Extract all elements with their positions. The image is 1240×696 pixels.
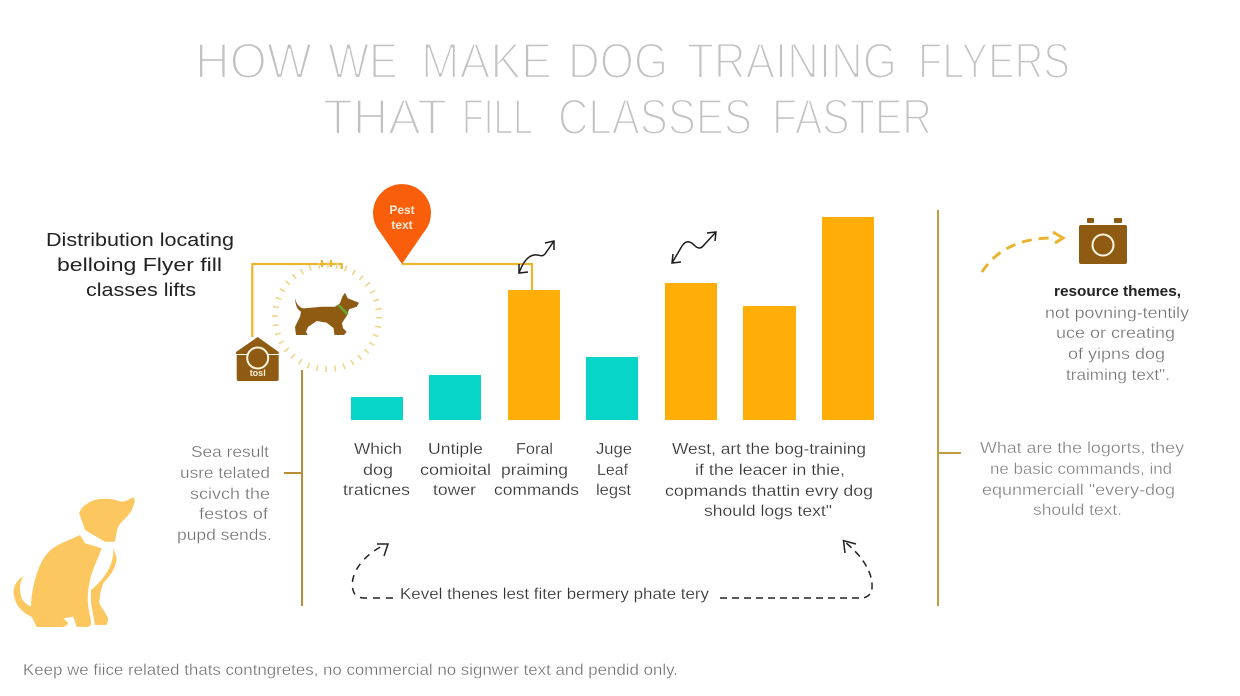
pin callout <box>373 184 431 264</box>
title: MAKE <box>421 33 552 89</box>
text block: right note: ne basic commands, ind <box>990 461 1172 478</box>
label: bar 2 <box>420 441 491 499</box>
label: bar 4: Leaf <box>597 462 629 479</box>
label: bar 4: legst <box>596 482 632 499</box>
text block: distribution heading: Distribution locating <box>46 230 234 250</box>
label: bars 5 to 7: West, art the bog-training <box>672 441 866 458</box>
label: bar 1 <box>343 441 410 499</box>
icon: house badge <box>236 337 279 381</box>
pin callout: text <box>391 218 413 232</box>
label: bars 5 to 7: copmands thattin evry dog <box>665 483 873 500</box>
pin callout: Pest <box>389 203 415 217</box>
title: HOW <box>195 33 313 89</box>
text block: resource themes: traiming text". <box>1066 367 1170 384</box>
footer note: Keep we fiice related thats contngretes, no commercial no signwer text and pendid only. <box>23 662 678 679</box>
label: bar 3 <box>494 441 579 499</box>
arrow: squiggle over third bar <box>519 241 554 273</box>
dashed bracket arrows with caption <box>352 541 872 603</box>
label: bar 1: traticnes <box>343 482 410 499</box>
text block: right note <box>980 440 1184 519</box>
vertical rule with right tick <box>938 210 961 606</box>
label: bar 2: tower <box>433 482 477 499</box>
icon: sitting dog silhouette <box>14 497 135 627</box>
label: bar 3: commands <box>494 482 579 499</box>
connector: house to pin to bar <box>252 260 532 337</box>
title <box>195 33 1070 145</box>
arrow: squiggle over fifth bar <box>672 232 716 263</box>
text block: resource themes: of yipns dog <box>1068 346 1165 363</box>
title: FLYERS <box>918 33 1070 89</box>
dashed bracket arrows with caption: Kevel thenes lest fiter bermery phate tery <box>400 586 709 603</box>
text block: right note: should text. <box>1033 502 1122 519</box>
vertical rule with left tick <box>284 370 302 606</box>
title: TRAINING <box>687 33 897 89</box>
text block: resource themes: resource themes, <box>1054 283 1181 300</box>
chart labels <box>343 441 873 520</box>
icon: camera <box>1079 218 1127 264</box>
label: bar 2: comioital <box>420 462 491 479</box>
label: bar 2: Untiple <box>428 441 483 458</box>
label: bars 5 to 7: if the leacer in thie, <box>695 462 845 479</box>
title: FILL <box>462 89 533 145</box>
text block: resource themes: not povning-tentily <box>1045 305 1189 322</box>
label: bar 1: dog <box>363 462 393 479</box>
title: THAT <box>323 89 447 145</box>
label: bars 5 to 7 <box>665 441 873 520</box>
text block: left note <box>177 444 272 544</box>
text block: left note: Sea result <box>191 444 270 461</box>
icon: dog in tick ring <box>275 265 379 369</box>
arrow: dashed gold to camera <box>982 232 1063 272</box>
title: DOG <box>568 33 668 89</box>
text block: left note: scivch the <box>190 486 270 503</box>
label: bar 1: Which <box>354 441 402 458</box>
text block: distribution heading: belloing Flyer fill <box>57 255 222 275</box>
text block: resource themes: uce or creating <box>1056 325 1175 342</box>
label: bar 3: Foral <box>516 441 553 458</box>
label: bar 4 <box>596 441 632 499</box>
title: CLASSES <box>558 89 752 145</box>
label: bar 4: Juge <box>596 441 632 458</box>
text block: resource themes <box>1045 283 1189 384</box>
text block: left note: pupd sends. <box>177 527 272 544</box>
text block: left note: festos of <box>199 506 269 523</box>
title: FASTER <box>772 89 932 145</box>
label: bars 5 to 7: should logs text" <box>704 503 832 520</box>
bar chart <box>351 217 874 420</box>
text block: distribution heading: classes lifts <box>86 280 196 300</box>
title: WE <box>328 33 398 89</box>
icon: house badge: tosl <box>250 368 266 378</box>
text block: distribution heading <box>46 230 234 300</box>
text block: right note: equnmerciall "every-dog <box>982 482 1175 499</box>
label: bar 3: praiming <box>501 462 568 479</box>
text block: left note: usre telated <box>180 465 270 482</box>
text block: right note: What are the logorts, they <box>980 440 1184 457</box>
